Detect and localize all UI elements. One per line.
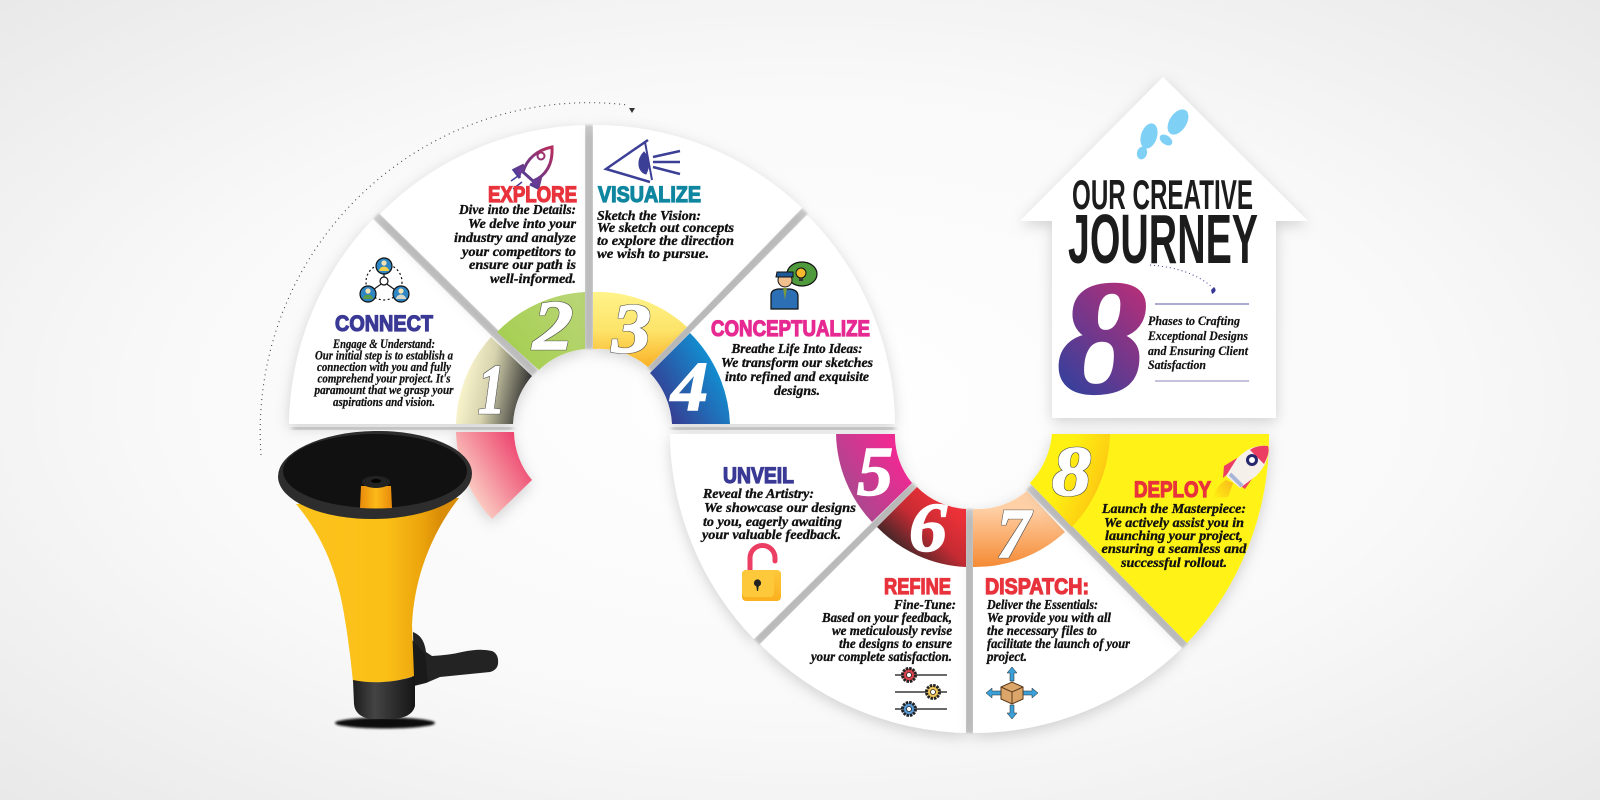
icon: box with arrows: [986, 667, 1038, 719]
panel: red arrow start segment: [456, 432, 532, 519]
text: explore body: ensure our path is: [469, 258, 577, 273]
ring segment 3: [593, 292, 687, 367]
icon: footprints: [1135, 106, 1193, 161]
text: visualize body: We sketch out concepts: [597, 221, 735, 236]
inner driver cone: [360, 486, 392, 508]
text: deploy body: ensuring a seamless and: [1102, 542, 1248, 557]
icon: pink rocket: [1213, 446, 1269, 498]
number 3: 3: [611, 291, 651, 368]
text: dispatch body: [986, 598, 1130, 665]
text: phases description: Phases to Crafting: [1148, 314, 1240, 328]
text: connect body: aspirations and vision.: [333, 395, 435, 409]
text: unveil body: We showcase our designs: [704, 501, 857, 516]
panel: refine: [760, 487, 966, 733]
text: connect body: connection with you and fully: [317, 360, 451, 374]
text: conceptualize body: Breathe Life Into Ideas:: [731, 342, 862, 357]
heading: explore: EXPLORE: [488, 182, 577, 207]
heading: unveil: UNVEIL: [723, 463, 794, 488]
text: deploy body: launching your project,: [1105, 529, 1243, 544]
panel: deploy: [1030, 434, 1269, 643]
text: deploy body: We actively assist you in: [1104, 516, 1244, 531]
title: [1068, 171, 1258, 278]
text: connect body: comprehend your project. It's: [318, 372, 451, 386]
text: refine body: Based on your feedback,: [821, 611, 952, 626]
text: visualize body: [597, 209, 735, 262]
horn body: [296, 498, 459, 683]
text: visualize body: to explore the direction: [597, 234, 734, 249]
text: deploy body: [1101, 502, 1248, 571]
heading: refine: REFINE: [884, 574, 951, 599]
icon: open padlock: [742, 546, 781, 601]
icon: eye with rays: [606, 140, 680, 182]
panel: title arrow: [1020, 77, 1308, 428]
text: phases description: [1147, 304, 1249, 381]
panel: explore: [380, 125, 585, 370]
text: explore body: [454, 203, 577, 287]
horn mouth: [277, 429, 473, 521]
text: unveil body: [700, 487, 857, 543]
text: visualize body: Sketch the Vision:: [597, 209, 701, 224]
text: connect body: [314, 337, 454, 409]
number 1: 1: [478, 352, 505, 429]
text: unveil body: to you, eagerly awaiting: [703, 515, 842, 530]
text: refine body: the designs to ensure: [839, 637, 952, 652]
text: unveil body: Reveal the Artistry:: [702, 487, 814, 502]
text: conceptualize body: We transform our sketches: [721, 356, 874, 371]
heading: deploy: DEPLOY: [1134, 477, 1211, 502]
lower grip: [353, 676, 415, 719]
dotted curve arrow: [1150, 265, 1216, 294]
number 5: 5: [857, 434, 893, 511]
text: visualize body: we wish to pursue.: [597, 247, 709, 262]
text: unveil body: your valuable feedback.: [700, 528, 841, 543]
ring segment 4: [650, 333, 730, 424]
text: refine body: Fine-Tune:: [893, 598, 956, 613]
number 8: 8: [1052, 434, 1091, 511]
icon: thinking person with bulb: [771, 262, 817, 309]
big number 8: 8: [1057, 249, 1147, 428]
text: deploy body: successful rollout.: [1120, 556, 1227, 571]
text: explore body: well-informed.: [490, 272, 576, 287]
text: explore body: industry and analyze: [454, 231, 576, 246]
panel: dispatch: [973, 491, 1182, 733]
panel: unveil: [670, 434, 912, 639]
text: deploy body: Launch the Masterpiece:: [1101, 502, 1246, 517]
icon: gear sliders: [895, 668, 947, 716]
text: conceptualize body: designs.: [774, 384, 820, 399]
heading: dispatch: DISPATCH:: [985, 574, 1089, 599]
icon: network of people: [360, 258, 409, 302]
heading: visualize: VISUALIZE: [598, 182, 701, 207]
text: dispatch body: the necessary files to: [987, 624, 1097, 639]
text: conceptualize body: into refined and exquisite: [725, 370, 869, 385]
panel: conceptualize: [650, 215, 895, 426]
ring segment 7: [973, 491, 1065, 567]
text: phases description: Exceptional Designs: [1147, 329, 1248, 343]
text: refine body: your complete satisfaction.: [809, 650, 952, 665]
title: JOURNEY: [1068, 200, 1258, 278]
text: explore body: Dive into the Details:: [458, 203, 576, 218]
ring segment 2: [497, 292, 585, 370]
text: connect body: Our initial step is to establish a: [315, 348, 453, 362]
ring segment 8: [1030, 434, 1110, 527]
handle: [413, 632, 498, 686]
text: dispatch body: We provide you with all: [987, 611, 1111, 626]
text: phases description: and Ensuring Client: [1148, 344, 1248, 358]
number 2: 2: [532, 288, 573, 365]
icon: rocket outline: [511, 147, 552, 189]
dotted arc arrow: [260, 103, 635, 455]
text: phases description: Satisfaction: [1148, 358, 1206, 372]
number 7: 7: [997, 496, 1033, 573]
text: connect body: paramount that we grasp your: [314, 383, 454, 397]
text: refine body: [809, 598, 956, 665]
ring segment 6: [877, 487, 966, 567]
panel: visualize: [593, 125, 802, 368]
text: dispatch body: project.: [986, 650, 1027, 665]
text: refine body: we meticulously revise: [832, 624, 952, 639]
number 6: 6: [909, 490, 947, 567]
text: conceptualize body: [721, 342, 874, 399]
text: connect body: Engage & Understand:: [332, 337, 435, 351]
text: explore body: your competitors to: [460, 245, 576, 260]
text: dispatch body: Deliver the Essentials:: [986, 598, 1098, 613]
title: OUR CREATIVE: [1072, 171, 1253, 218]
text: dispatch body: facilitate the launch of your: [987, 637, 1130, 652]
heading: connect: CONNECT: [335, 311, 434, 336]
megaphone: [277, 429, 498, 728]
ring segment 5: [836, 434, 912, 522]
heading: conceptualize: CONCEPTUALIZE: [711, 316, 870, 341]
text: explore body: We delve into your: [468, 217, 577, 232]
number 4: 4: [669, 349, 708, 426]
panel: connect: [289, 219, 532, 429]
ring segment 1: [456, 337, 532, 424]
